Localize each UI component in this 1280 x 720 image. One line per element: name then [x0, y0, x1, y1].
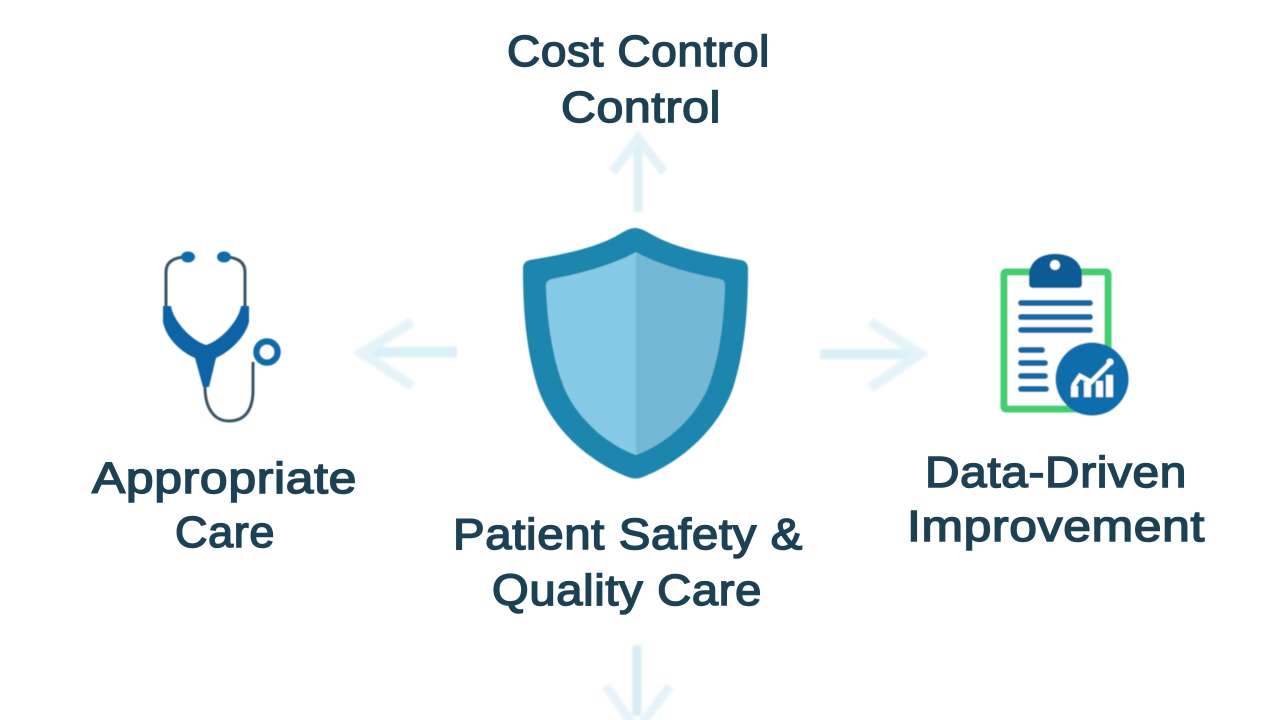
- arrow: right: [820, 322, 920, 388]
- arrow: up: [613, 138, 664, 212]
- icon: stethoscope: [163, 252, 278, 421]
- icon: clipboard with chart: [1004, 254, 1128, 416]
- label: Patient Safety & Quality Care: Patient Safety &: [453, 510, 803, 559]
- label: Data-Driven Improvement: Data-Driven: [925, 448, 1187, 497]
- label: Patient Safety & Quality Care: Quality Care: [492, 566, 762, 615]
- arrow: down: [606, 645, 670, 720]
- heading: Cost Control: [507, 27, 770, 132]
- label: Appropriate Care: Care: [175, 508, 275, 557]
- label: Data-Driven Improvement: [907, 448, 1205, 551]
- heading: Cost Control: Control: [561, 83, 721, 132]
- heading: Cost Control: Cost Control: [507, 27, 770, 76]
- icon: shield: [523, 228, 748, 478]
- label: Appropriate Care: [92, 454, 357, 557]
- label: Patient Safety & Quality Care: [453, 510, 803, 615]
- label: Appropriate Care: Appropriate: [92, 454, 357, 503]
- arrow: left: [362, 322, 457, 386]
- label: Data-Driven Improvement: Improvement: [907, 502, 1205, 551]
